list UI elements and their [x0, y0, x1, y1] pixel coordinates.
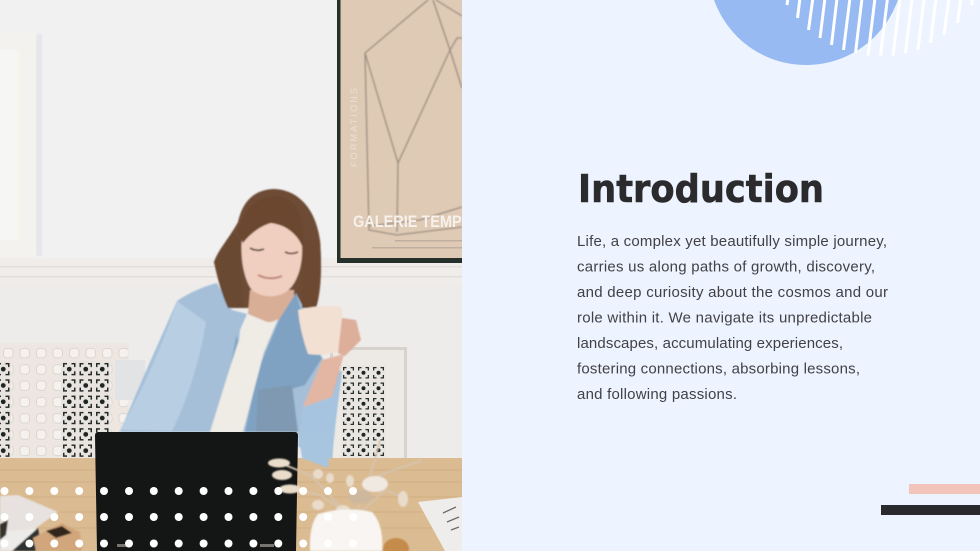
hair back [214, 189, 321, 308]
jacket left sleeve highlight [120, 301, 206, 431]
jacket pocket [256, 385, 298, 432]
dried flowers [268, 440, 422, 515]
lower wall panel [0, 284, 462, 459]
wall [0, 0, 337, 258]
title: Introduction [578, 167, 824, 211]
pink accent bar [909, 484, 980, 494]
body paragraph [577, 233, 888, 403]
hair front strands [214, 260, 232, 309]
items on the left of the desk [0, 495, 82, 551]
body paragraph: carries us along paths of growth, discovery, [577, 258, 875, 276]
jacket placket [232, 336, 238, 360]
eyes and mouth [250, 248, 298, 254]
t-shirt [210, 314, 278, 432]
denim jacket [120, 282, 342, 438]
vase [310, 509, 409, 551]
body paragraph: Life, a complex yet beautifully simple journey, [577, 233, 887, 250]
book at the right of the desk [418, 497, 462, 551]
laptop [95, 432, 298, 551]
photo: woman with coffee at a desk [0, 0, 473, 551]
left radiator cover [0, 343, 145, 458]
face [241, 222, 302, 296]
body paragraph: and deep curiosity about the cosmos and our [577, 284, 888, 301]
dark accent bar [881, 505, 980, 515]
jacket dark front panel [245, 293, 322, 432]
blue circle decoration [708, 0, 904, 65]
body paragraph: and following passions. [577, 386, 737, 403]
wall moulding [0, 266, 462, 278]
woman [120, 189, 361, 468]
desk [0, 458, 462, 551]
poster [337, 0, 473, 263]
mug-holding hand [338, 318, 361, 356]
poster: FORMATIONS [349, 88, 359, 167]
forearm [303, 354, 344, 407]
mug [298, 306, 342, 355]
sleeve over desk [298, 432, 332, 468]
body paragraph: role within it. We navigate its unpredictable [577, 310, 872, 326]
body paragraph: fostering connections, absorbing lessons, [577, 360, 860, 378]
jacket right sleeve [298, 434, 335, 458]
fringe [240, 220, 287, 244]
white diagonal stripes decoration [787, 0, 974, 56]
body paragraph: landscapes, accumulating experiences, [577, 335, 843, 352]
neck [248, 290, 294, 324]
poster: GALERIE TEMPO [353, 213, 473, 231]
left picture frame [36, 34, 42, 256]
dot grid overlay [0, 487, 357, 548]
right radiator cover [330, 347, 407, 459]
